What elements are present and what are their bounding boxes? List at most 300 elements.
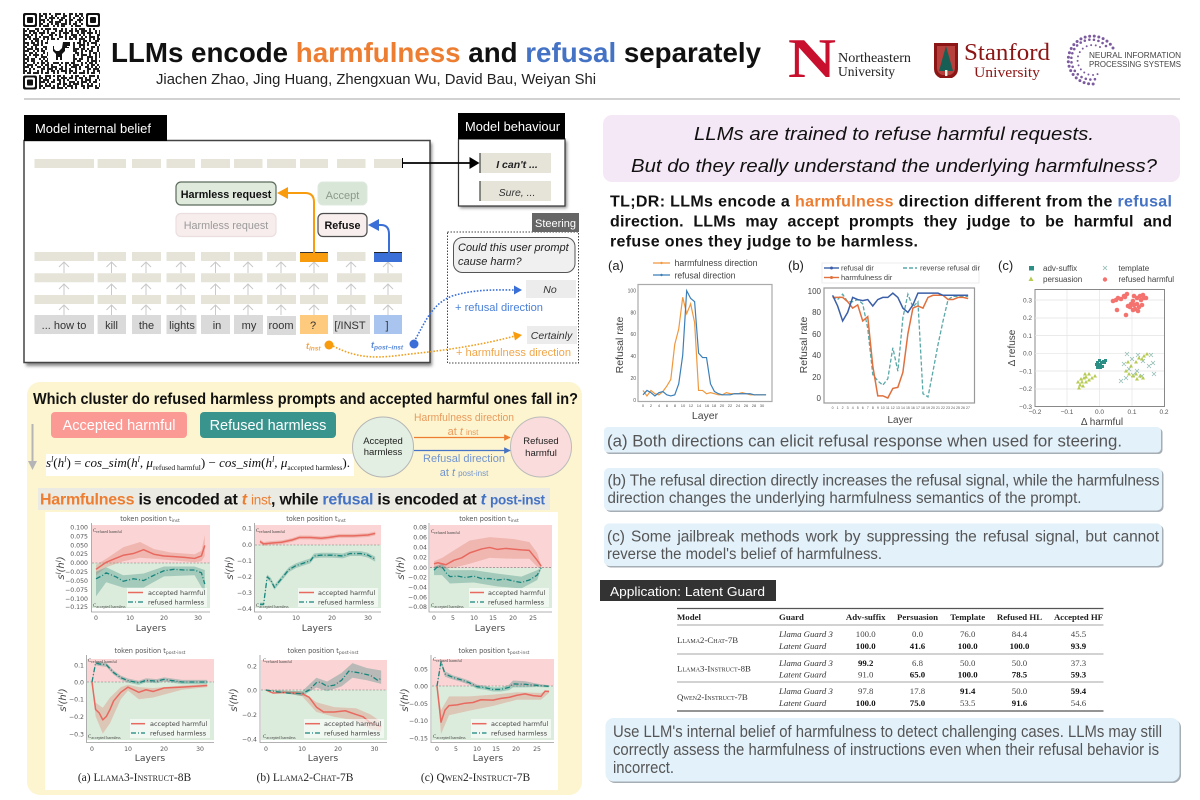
chart: row 2 Qwen2 t post-inst (399, 647, 554, 764)
table: latent guard results: 76.0 (960, 629, 976, 639)
text: TL;DR: direction. LLMs may accept prompts they judge to be harmful and (610, 214, 1172, 230)
chart: (b) refusal rate by layer: 26 (961, 406, 965, 410)
logo: Northeastern University: N (788, 28, 836, 90)
chart: (a) refusal rate by layer: harmfulness direction (674, 258, 758, 268)
chart: row 2 Llama3 t post-inst (57, 647, 214, 764)
chart: row 2 Qwen2 t post-inst: l (399, 692, 407, 694)
chart: row 1 Llama3 t inst: 10 (126, 615, 134, 622)
table: latent guard results: 100.0 (856, 698, 876, 708)
chart: (a) refusal rate by layer: 80 (630, 310, 636, 316)
hidden state blocks (34, 159, 402, 304)
chart: row 2 Llama3 t post-inst: ) (58, 688, 69, 693)
chart: row 1 Qwen2 t inst: ) (396, 556, 407, 561)
formula (46, 454, 354, 476)
chart: (b) refusal rate by layer: 16 (911, 406, 915, 410)
chart: (c) scatter: −0.3 (1019, 404, 1032, 411)
chart: row 1 Qwen2 t inst: inst (511, 518, 519, 524)
chart: (c) scatter: template (1118, 264, 1150, 273)
chart: row 1 Qwen2 t inst: l (395, 572, 403, 574)
chart: row 1 Llama2 t inst: 30 (364, 615, 372, 622)
chart: row 1 Qwen2 t inst: 0.08 (413, 524, 427, 532)
arrow: refusal path (368, 219, 389, 253)
chart: row 1 Qwen2 t inst: l (395, 560, 403, 562)
table: latent guard results: 100.0 (958, 670, 978, 680)
chart: row 2 Qwen2 t post-inst: −0.05 (409, 701, 428, 708)
chart: (b) refusal rate by layer: 0 (832, 406, 834, 410)
chart: row 1 Llama2 t inst: token position t (286, 515, 338, 523)
input tokens: the (139, 320, 154, 332)
input tokens: ? (310, 320, 316, 332)
table: latent guard results: 75.0 (910, 698, 926, 708)
label: + refusal direction: + refusal direction (455, 302, 543, 314)
chart: row 2 Qwen2 t post-inst: 25 (533, 746, 541, 753)
arrow: output to behaviour (402, 157, 480, 169)
scatter: persuasion (1076, 352, 1149, 390)
caption: b: (b) Llama2-Chat-7B (257, 772, 354, 784)
input tokens (34, 315, 402, 335)
chart: row 1 Qwen2 t inst: 20 (509, 615, 517, 622)
token position marker: t post-inst: post−inst (373, 344, 404, 352)
chart: row 2 Llama2 t post-inst: 20 (334, 746, 342, 753)
steering prompt bubble: Could this user prompt (458, 242, 570, 254)
logo: NeurIPS: PROCESSING SYSTEMS (1089, 60, 1181, 69)
chart: (b) refusal rate by layer: 3 (847, 406, 849, 410)
chart: row 1 Llama2 t inst: l (224, 560, 232, 562)
callout: purple question: But do they really understand the underlying harmfulness? (631, 156, 1157, 176)
formula: l (64, 455, 67, 464)
formula: , μ (274, 455, 288, 470)
chart: row 1 Qwen2 t inst: refused harmless (488, 598, 545, 606)
chart: row 1 Qwen2 t inst: 0.04 (413, 544, 427, 552)
chart: row 2 Qwen2 t post-inst: accepted harmful (491, 720, 548, 728)
chart: (a) refusal rate by layer: 8 (674, 403, 677, 408)
chart: row 2 Llama3 t post-inst: l (57, 704, 65, 706)
logo: NeurIPS (1068, 36, 1181, 84)
text: TL;DR: refuse ones they judge to be harmless. (610, 234, 918, 250)
table: latent guard results: 100.0 (856, 629, 876, 639)
panel: model behaviour: Sure, ... (499, 187, 535, 199)
chart: (b) refusal rate by layer: 23 (946, 406, 950, 410)
chart: (a) refusal rate by layer: 20 (720, 403, 725, 408)
chart: (c) scatter: persuasion (1043, 275, 1082, 284)
chart: (b) refusal rate by layer: 22 (941, 406, 945, 410)
table: latent guard results: Llama Guard 3 (778, 629, 834, 639)
callout: (b) (604, 468, 1164, 512)
callout: latent guard summary (606, 718, 1181, 783)
chart: row 1 Qwen2 t inst: 10 (470, 615, 478, 622)
chart: row 1 Llama2 t inst: l (224, 572, 232, 574)
chart: (b) refusal rate by layer: 27 (966, 406, 970, 410)
activation arrows (59, 262, 393, 315)
scatter: template (1119, 352, 1156, 383)
table: latent guard results: Qwen2-Instruct-7B (677, 692, 748, 702)
chart: row 2 Llama2 t post-inst: −0.4 (242, 736, 257, 744)
chart: row 2 Llama2 t post-inst: refused harmful (266, 659, 293, 664)
arrow: steering refusal dotted (414, 286, 522, 342)
token position marker: t post-inst: t (371, 340, 374, 350)
formula: ) = (66, 455, 85, 470)
callout: purple question: LLMs are trained to refuse harmful requests. (694, 124, 1094, 144)
panel: cluster analysis (27, 382, 582, 795)
heading: model internal belief tab: Model internal belief (35, 121, 151, 136)
logo: Stanford University: Stanford (964, 39, 1050, 66)
chart: (a) refusal rate by layer: 100 (628, 288, 636, 294)
chart: row 1 Qwen2 t inst: 5 (451, 615, 455, 622)
chart: row 2 Llama3 t post-inst: refused harmless (150, 730, 207, 738)
chart: (b) refusal rate by layer: 40 (812, 351, 822, 360)
chart: row 1 Llama3 t inst: −0.050 (65, 578, 88, 585)
callout: purple question (603, 115, 1180, 182)
chart: row 2 Llama2 t post-inst: l (228, 704, 236, 706)
formula: accepted harmless (287, 463, 342, 472)
chart: row 2 Qwen2 t post-inst: C (433, 735, 436, 740)
table: latent guard results: Latent Guard (778, 641, 827, 651)
chart: (b) refusal rate by layer: 19 (926, 406, 930, 410)
table: latent guard results: 59.4 (1071, 686, 1087, 696)
input tokens: ] (385, 320, 389, 332)
chart: (b) refusal rate by layer: Layer (887, 415, 913, 426)
chart: row 2 Qwen2 t post-inst: −0.15 (409, 736, 428, 742)
panel: model behaviour: Model behaviour (465, 120, 560, 134)
chart: row 2 Qwen2 t post-inst: token position t (459, 647, 510, 655)
diagram: directions between clusters: at t inst (448, 426, 479, 438)
chart: (b) refusal rate by layer: 1 (837, 406, 839, 410)
table: latent guard results: 50.0 (1012, 658, 1028, 668)
formula: ( (53, 455, 58, 470)
callout: (b): direction changes the underlying harmfulness semantics of the prompt. (608, 490, 1082, 507)
table: latent guard results: Refused HL (997, 612, 1042, 622)
chart: row 1 Llama2 t inst: −0.4 (237, 606, 252, 613)
chart: (c) scatter: Δ refuse (1007, 329, 1018, 366)
response: no (526, 280, 576, 298)
label: + harmfulness direction: + harmfulness direction (456, 347, 571, 359)
text: TL;DR (610, 194, 1172, 250)
chart: (a) refusal rate by layer: (a) (608, 258, 624, 273)
diagram: directions between clusters (352, 412, 572, 479)
chart: row 1 Llama2 t inst: accepted harmful (318, 589, 375, 597)
logo: NeurIPS: NEURAL INFORMATION (1089, 51, 1181, 60)
token position marker: t inst (306, 340, 334, 352)
arrow: gray down (28, 424, 37, 470)
chart: row 1 Llama2 t inst: Layers (302, 623, 332, 634)
chart: row 1 Llama2 t inst: inst (338, 518, 346, 524)
chart: (a) refusal rate by layer: 0 (642, 403, 645, 408)
chart: (a) refusal rate by layer: 60 (630, 332, 636, 338)
logo: Stanford University (934, 39, 1050, 81)
table: latent guard results: Latent Guard (778, 698, 827, 708)
chart: row 2 Llama3 t post-inst: −0.3 (69, 732, 84, 738)
chart: (b) refusal rate by layer: 15 (906, 406, 910, 410)
heading: which cluster: Which cluster do refused harmless prompts and accepted harmful ones fall in? (33, 391, 578, 408)
chart: row 1 Llama3 t inst: l (55, 572, 63, 574)
chart: row 1 Qwen2 t inst: 0.06 (413, 534, 427, 542)
chart: (a) refusal rate by layer: 2 (650, 403, 653, 408)
chart: row 2 Llama3 t post-inst: 20 (160, 746, 168, 753)
caption: a: (a) Llama3-Instruct-8B (78, 772, 191, 784)
chart: row 2 Llama2 t post-inst: accepted harmful (324, 720, 381, 728)
logo: Northeastern University (788, 28, 911, 90)
chart: row 1 Llama3 t inst: −0.075 (65, 587, 88, 594)
callout: (c): reverse the model's belief of harmfulness. (607, 546, 882, 563)
table: latent guard results: Llama Guard 3 (778, 686, 834, 696)
callout: (c): (c) Some jailbreak methods work by suppressing the refusal signal, but cannot (607, 528, 1160, 546)
chart: row 1 Llama2 t inst: s (225, 574, 236, 580)
chart: row 1 Llama2 t inst: C (256, 604, 259, 609)
chart: (b) refusal rate by layer: 5 (857, 406, 859, 410)
label: harmless request (active): Harmless request (181, 189, 272, 201)
chart: (a) refusal rate by layer: 12 (689, 403, 694, 408)
chart: row 1 Llama3 t inst: l (55, 560, 63, 562)
chart: row 1 Qwen2 t inst: C (431, 604, 434, 609)
chart: row 1 Llama3 t inst: −0.125 (65, 604, 88, 611)
chart: row 2 Llama2 t post-inst: (h (229, 694, 240, 704)
chart: row 1 Qwen2 t inst: −0.04 (408, 584, 427, 592)
chart: (c) scatter: 0.0 (1023, 350, 1032, 358)
chart: (a) refusal rate by layer: refusal direction (674, 270, 736, 280)
chart: row 1 Qwen2 t inst (395, 515, 552, 634)
chart: row 1 Qwen2 t inst: Layers (475, 623, 505, 634)
heading: model internal belief tab (24, 115, 167, 141)
arrow: steering harmfulness dotted (333, 332, 522, 357)
chart: row 1 Llama3 t inst: 0.075 (70, 534, 88, 540)
input tokens: [/INST (334, 320, 366, 332)
chart: (b) refusal rate by layer (788, 258, 981, 426)
chart: row 2 Llama3 t post-inst: 0.1 (74, 662, 84, 670)
chart: (c) scatter: 0.0 (1095, 409, 1104, 416)
chart: row 1 Llama2 t inst: 0.0 (242, 542, 252, 549)
logo: Stanford University: University (974, 65, 1041, 81)
table: latent guard results: 0.0 (912, 629, 924, 639)
chart: row 1 Llama2 t inst: 0.1 (242, 526, 252, 532)
chart: row 1 Llama3 t inst: inst (172, 518, 180, 524)
table: latent guard results: Llama2-Chat-7B (677, 635, 738, 645)
table: latent guard results: Accepted HF (1054, 612, 1103, 622)
chart: row 2 Llama2 t post-inst: token position t (288, 647, 339, 655)
chart: row 1 Llama3 t inst: −0.025 (65, 569, 88, 576)
diagram: directions between clusters: Accepted (363, 436, 403, 447)
chart: row 1 Qwen2 t inst: C (431, 530, 434, 535)
callout: (c) (604, 524, 1164, 568)
chart: row 2 Llama3 t post-inst: accepted harmful (150, 720, 207, 728)
input tokens: lights (169, 320, 195, 332)
chart: row 1 Llama2 t inst: −0.3 (237, 590, 252, 597)
chart: (b) refusal rate by layer: 10 (881, 406, 885, 410)
input tokens: ... how to (42, 320, 86, 332)
chart: row 1 Qwen2 t inst: −0.06 (408, 594, 427, 602)
token position marker: t inst: t (306, 341, 309, 351)
table: latent guard results: 54.6 (1071, 698, 1087, 708)
table: latent guard results: 99.2 (858, 658, 874, 668)
chart: row 1 Llama3 t inst: refused harmless (148, 598, 205, 606)
label: harmless request (active) (176, 182, 276, 205)
chart: row 2 Llama3 t post-inst: 30 (196, 746, 204, 753)
chart: row 1 Qwen2 t inst: 0.00 (413, 565, 427, 572)
chart: (c) scatter: 0.3 (1023, 298, 1032, 304)
chart: row 1 Llama3 t inst: 0.050 (70, 542, 88, 550)
formula: ). (342, 455, 350, 470)
chart: row 2 Llama2 t post-inst: C (263, 735, 266, 740)
chart: row 1 Qwen2 t inst: refused harmful (434, 530, 461, 535)
chart: (a) refusal rate by layer: 14 (697, 403, 702, 408)
panel: model behaviour: I can't ... (496, 159, 538, 171)
formula: cos_sim(h (85, 455, 138, 470)
formula: h (58, 455, 64, 470)
chart: (b) refusal rate by layer: 21 (936, 406, 940, 410)
chart: (a) refusal rate by layer: 20 (630, 376, 636, 382)
chart: row 2 Llama2 t post-inst: 0 (264, 746, 268, 753)
chart: row 2 Qwen2 t post-inst: post-inst (510, 650, 530, 656)
chart: row 1 Llama3 t inst: 0.000 (70, 560, 88, 567)
chart: (a) refusal rate by layer: 40 (630, 354, 636, 360)
chart: row 1 Qwen2 t inst: accepted harmless (434, 604, 464, 609)
scatter: adv-suffix (1095, 359, 1107, 369)
chart: (b) refusal rate by layer: Refusal rate (798, 317, 810, 373)
diagram: directions between clusters: harmless (364, 447, 403, 458)
chart: row 2 Llama3 t post-inst: refused harmful (91, 659, 118, 664)
diagram: directions between clusters: Refused (523, 436, 559, 447)
chart: row 1 Llama3 t inst: s (56, 574, 67, 580)
table: latent guard results: Persuasion (897, 612, 938, 622)
chip: refused harmless: Refused harmless (210, 418, 326, 434)
input tokens: room (268, 320, 294, 332)
table: latent guard results: 78.5 (1012, 670, 1028, 680)
chart: row 1 Llama3 t inst: C (93, 529, 96, 534)
QR code (23, 13, 100, 90)
chart: row 2 Qwen2 t post-inst: refused harmless (491, 730, 548, 738)
chart: (b) refusal rate by layer: 11 (886, 406, 890, 410)
chart: row 1 Llama3 t inst: 0.100 (70, 524, 88, 532)
table: latent guard results: Model (677, 612, 701, 622)
diagram: directions between clusters: Refusal direction (423, 453, 505, 465)
chart: row 1 Llama2 t inst (224, 515, 381, 634)
chart: row 1 Llama3 t inst: accepted harmful (148, 589, 205, 597)
chart: row 2 Llama2 t post-inst: −0.2 (242, 712, 257, 719)
response: no: No (543, 284, 557, 296)
arrow: harmfulness path (277, 187, 314, 253)
table: latent guard results: 84.4 (1012, 629, 1028, 639)
table: latent guard results: 53.5 (960, 698, 976, 708)
chart: (b) refusal rate by layer: 18 (921, 406, 925, 410)
chart: row 1 Llama3 t inst: token position t (120, 515, 172, 523)
diagram: directions between clusters: Harmfulness direction (414, 412, 514, 424)
chart: row 2 Llama3 t post-inst: 0.0 (74, 680, 84, 686)
response: certainly (527, 326, 577, 344)
chart: (c) scatter: adv-suffix (1043, 264, 1077, 273)
heading: application tab (600, 580, 776, 601)
chart: row 1 Llama3 t inst (55, 515, 210, 634)
table: latent guard results: Llama Guard 3 (778, 658, 834, 668)
chart: row 1 Qwen2 t inst: −0.02 (408, 574, 427, 582)
chart: (c) scatter: refused harmful (1118, 275, 1174, 284)
formula: l (272, 455, 275, 464)
chart: (a) refusal rate by layer (608, 258, 772, 422)
chart: row 2 Qwen2 t post-inst: ) (400, 688, 411, 693)
table: latent guard results: 91.6 (1012, 698, 1028, 708)
chart: (b) refusal rate by layer: 20 (812, 373, 822, 382)
chart: (a) refusal rate by layer: 4 (658, 403, 661, 408)
chart: (b) refusal rate by layer: reverse refusal dir (920, 264, 981, 272)
chart: row 2 Qwen2 t post-inst: refused harmful (436, 658, 463, 663)
chart: row 2 Llama2 t post-inst: Layers (308, 753, 338, 764)
diagram: directions between clusters: harmful (525, 448, 557, 459)
chart: row 1 Llama2 t inst: ) (225, 556, 236, 561)
chart: row 2 Qwen2 t post-inst: l (399, 704, 407, 706)
table: latent guard results: 100.0 (958, 641, 978, 651)
table: latent guard results (677, 608, 1104, 711)
formula: l (51, 455, 54, 464)
label: accept (faded): Accept (326, 190, 359, 202)
table: latent guard results: 93.9 (1071, 641, 1087, 651)
chart: row 2 Llama3 t post-inst: post-inst (166, 650, 186, 656)
chart: (a) refusal rate by layer: 30 (760, 403, 765, 408)
formula: cos_sim(h (219, 455, 272, 470)
chart: (a) refusal rate by layer: Refusal rate (614, 317, 626, 373)
chart: (c) scatter: Δ harmful (1081, 417, 1123, 428)
chart: row 1 Llama3 t inst: refused harmful (96, 529, 123, 534)
chart: row 1 Llama3 t inst: accepted harmless (96, 604, 126, 609)
chart: (b) refusal rate by layer: (b) (788, 258, 804, 273)
chart: (a) refusal rate by layer: 28 (752, 403, 757, 408)
chart: row 2 Llama2 t post-inst: 0.0 (247, 688, 257, 694)
callout: latent guard summary: incorrect. (613, 759, 674, 777)
table: latent guard results: Llama3-Instruct-8B (677, 664, 751, 674)
table: latent guard results: 100.0 (1010, 641, 1030, 651)
chart: row 1 Qwen2 t inst: accepted harmful (488, 589, 545, 597)
chart: row 2 Llama3 t post-inst: accepted harmless (91, 735, 121, 740)
chart: (a) refusal rate by layer: 6 (666, 403, 669, 408)
steering prompt bubble (454, 238, 575, 272)
chart: row 1 Llama3 t inst: −0.100 (65, 596, 88, 603)
steering prompt bubble: cause harm? (458, 256, 522, 268)
chart: row 2 Qwen2 t post-inst: 20 (512, 746, 520, 753)
chart: row 2 Llama2 t post-inst (228, 647, 387, 764)
chart: row 2 Llama3 t post-inst: 0 (90, 746, 94, 753)
logo: Northeastern University: Northeastern (838, 50, 911, 65)
label: refuse (active): Refuse (324, 220, 361, 232)
chart: row 1 Llama2 t inst: 0 (258, 615, 262, 622)
chart: row 2 Llama3 t post-inst: l (57, 692, 65, 694)
chart: (b) refusal rate by layer: harmfulness dir (841, 273, 893, 282)
chart: row 1 Llama2 t inst: refused harmful (259, 529, 286, 534)
formula: ) − (201, 455, 219, 470)
table: latent guard results: 50.0 (960, 658, 976, 668)
label: refuse (active) (318, 214, 367, 236)
chart: row 1 Llama3 t inst: ) (56, 556, 67, 561)
caption: c: (c) Qwen2-Instruct-7B (421, 772, 530, 784)
chart: row 1 Qwen2 t inst: (h (396, 562, 407, 572)
chart: row 2 Qwen2 t post-inst: (h (400, 694, 411, 704)
chart: (c) scatter: 0.2 (1023, 315, 1032, 322)
panel: steering: Steering (535, 218, 576, 230)
chart: (a) refusal rate by layer: 26 (744, 403, 749, 408)
table: latent guard results: 100.0 (856, 641, 876, 651)
chart: (a) refusal rate by layer: 24 (736, 403, 741, 408)
chart: row 1 Llama2 t inst: C (256, 529, 259, 534)
logo: Northeastern University: University (838, 64, 895, 79)
table: latent guard results: 41.6 (910, 641, 926, 651)
chart: (b) refusal rate by layer: 0 (817, 394, 822, 403)
chart: row 1 Qwen2 t inst: 0.02 (413, 554, 427, 562)
chart: row 2 Llama3 t post-inst: −0.1 (69, 696, 84, 704)
panel: model internal belief (24, 115, 432, 366)
table: latent guard results: 91.4 (960, 686, 976, 696)
title: LLMs encode harmfulness and refusal separately (111, 37, 761, 68)
chart: row 2 Qwen2 t post-inst: C (433, 658, 436, 663)
highlighted activation: t post-inst (374, 252, 402, 262)
label: accept (faded) (318, 182, 367, 205)
table: latent guard results: Latent Guard (778, 670, 827, 680)
chart: (b) refusal rate by layer: 4 (852, 406, 854, 410)
